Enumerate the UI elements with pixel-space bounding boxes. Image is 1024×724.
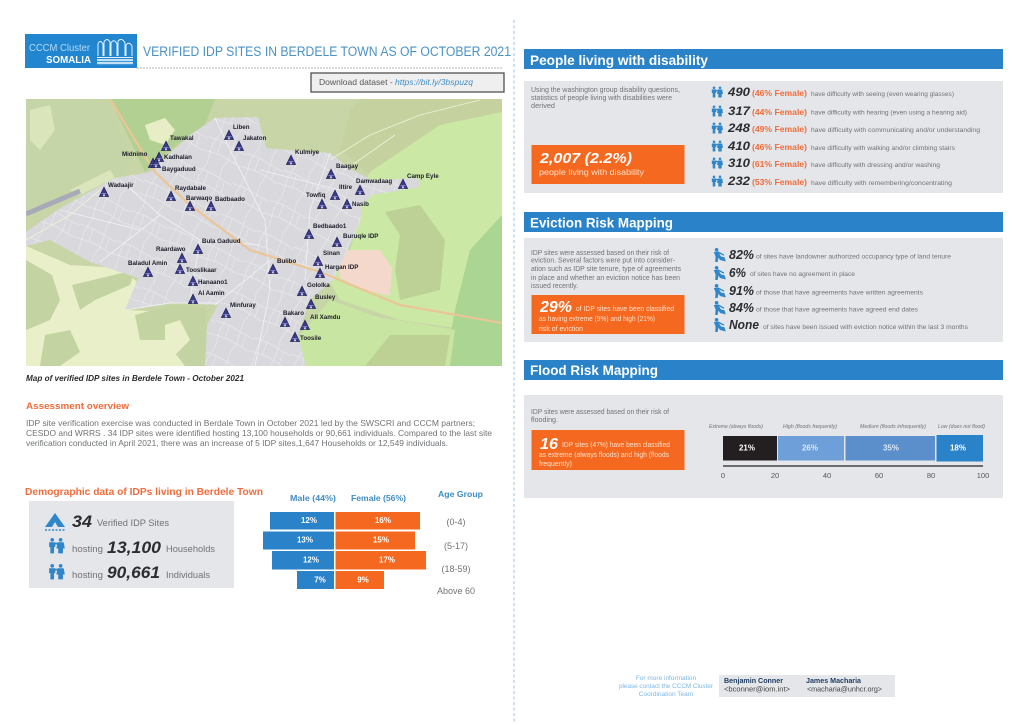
population pyramid: (5-17): [444, 541, 468, 551]
map site labels: Toosile: [300, 335, 322, 342]
eviction statistics list: of those that have agreements have written agreements: [756, 290, 924, 296]
map site labels: Baagay: [336, 163, 359, 170]
disability statistics list: 310: [728, 156, 750, 170]
stacked bar chart: flood risk: 21%: [739, 444, 755, 452]
disability intro text: derived: [531, 103, 555, 110]
callout: 16 sites: 16: [540, 436, 558, 453]
stacked bar chart: flood risk: Low (does not flood): [938, 424, 985, 430]
logo: CCCM Cluster Somalia: SOMALIA: [46, 55, 91, 66]
panel: key figures: 34: [72, 512, 93, 531]
map site labels: Bakaro: [283, 310, 304, 317]
disability statistics list: have difficulty with dressing and/or washing: [811, 162, 940, 169]
disability statistics list: have difficulty with walking and/or climbing stairs: [811, 145, 956, 152]
callout: 16 sites: [532, 430, 684, 470]
panel heading: eviction risk mapping: [524, 212, 1003, 232]
disability statistics list: (61% Female): [752, 159, 807, 169]
disability statistics list: 232: [727, 174, 750, 188]
callout: 16 sites: frequently): [539, 461, 572, 468]
eviction statistics list: 82%: [729, 247, 754, 262]
stacked bar chart: flood risk: 18%: [950, 444, 966, 452]
panel: people living with disability: [524, 81, 1003, 193]
footer: contact note: [619, 675, 714, 698]
download dataset box: Download dataset - https://bit.ly/3bspuzq: [319, 77, 473, 87]
map site labels: Bula Gaduud: [202, 238, 241, 245]
population pyramid: 13%: [297, 536, 313, 544]
footer: contacts: James Macharia: [806, 676, 862, 685]
population pyramid: (18-59): [441, 564, 471, 574]
icon: people: [49, 538, 65, 553]
map main road: [110, 99, 502, 323]
map site labels: Tawakal: [170, 135, 194, 142]
disability statistics list: 410: [727, 139, 750, 153]
logo: CCCM Cluster Somalia: CCCM Cluster: [29, 42, 90, 54]
map site labels: Midnimo: [122, 151, 148, 158]
callout: 29%: as having extreme (9%) and high (21%): [539, 316, 655, 323]
population pyramid: 16%: [375, 516, 391, 525]
footer: contacts: [719, 675, 895, 697]
disability statistics list: have difficulty with seeing (even wearing glasses): [811, 91, 954, 98]
flood intro text: IDP sites were assessed based on their risk of: [531, 409, 669, 416]
flood intro text: [531, 409, 669, 424]
eviction statistics list: 6%: [729, 265, 746, 280]
eviction intro text: [531, 250, 681, 290]
map site labels: Al Aamin: [198, 290, 225, 297]
footer: contacts: Benjamin Conner: [724, 676, 783, 685]
map site markers: [99, 130, 408, 342]
footer: contact note: please contact the CCCM Cluster: [619, 683, 714, 690]
map site labels: [108, 124, 439, 342]
map of verified IDP sites: [26, 99, 502, 366]
map site labels: Buruqle IDP: [343, 233, 378, 240]
panel: flood risk mapping: [524, 395, 1003, 498]
callout: 29%: [532, 295, 684, 334]
panel: key figures: hosting: [72, 570, 103, 580]
map site labels: Bulibo: [277, 258, 296, 265]
heading: demographic data: Demographic data of IDPs living in Berdele Town: [25, 486, 263, 498]
eviction statistics list: of sites have been issued with eviction notice within the last 3 months: [763, 324, 969, 331]
map site labels: Sinan: [323, 250, 340, 257]
map site labels: Damwadaag: [356, 178, 392, 185]
footer: contacts: <macharia@unhcr.org>: [807, 684, 883, 694]
map site labels: Minfuray: [230, 302, 256, 309]
eviction intro text: IDP sites were assessed based on their risk of: [531, 250, 669, 257]
heading: assessment overview: Assessment overview: [26, 401, 130, 412]
disability statistics list: (46% Female): [752, 142, 807, 152]
map site labels: Kadhalan: [164, 154, 192, 161]
panel: eviction risk mapping: [524, 238, 1003, 342]
map site labels: Busley: [315, 294, 336, 301]
eviction statistics list: 84%: [729, 300, 754, 315]
footer: contacts: <bconner@iom.int>: [724, 684, 791, 694]
stacked bar chart: flood risk: 80: [927, 471, 935, 480]
stacked bar chart: flood risk: Medium (floods infrequently): [860, 424, 926, 430]
map site labels: Camp Eyle: [407, 173, 439, 180]
disability statistics list: 490: [727, 85, 750, 99]
stacked bar chart: flood risk: Extreme (always floods): [709, 424, 763, 430]
map airstrip: [26, 191, 80, 214]
map site labels: All Xamdu: [310, 314, 340, 321]
map town built-up area: [26, 117, 420, 366]
disability statistics list: (44% Female): [752, 107, 807, 117]
map site labels: Hargan IDP: [325, 264, 358, 271]
panel: key figures: 90,661: [107, 563, 160, 582]
panel: key figures: Verified IDP Sites: [97, 518, 170, 528]
disability intro text: Using the washington group disability questions,: [531, 87, 680, 94]
assessment overview text: IDP site verification exercise was conducted in Berdale Town in October 2021 led by the SWSCRI and CCCM partners;: [26, 418, 475, 428]
population pyramid: [263, 489, 483, 596]
population pyramid: 7%: [314, 576, 326, 584]
map site labels: Raardawo: [156, 246, 186, 253]
title: VERIFIED IDP SITES IN BERDELE TOWN AS OF OCTOBER 2021: [143, 44, 511, 59]
callout: 2,007 people: people living with disability: [539, 167, 645, 177]
panel heading: flood risk mapping: [524, 360, 1003, 380]
panel heading: people living with disability: [524, 49, 1003, 69]
callout: 29%: 29%: [539, 299, 572, 316]
icon: people: [49, 564, 65, 579]
panel: key figures: Individuals: [166, 570, 211, 580]
disability statistics list: have difficulty with remembering/concentrating: [811, 180, 952, 187]
callout: 29%: of IDP sites have been classified: [576, 306, 674, 313]
eviction statistics list: of sites have landowner authorized occupancy type of land tenure: [756, 254, 951, 260]
map site labels: Tooslikaar: [186, 267, 217, 274]
assessment overview text: CESDO and WRRS . 34 IDP sites were identified hosting 13,100 households or 90,661 individuals. Compared to the last site: [26, 428, 492, 438]
panel heading: people living with disability: People living with disability: [530, 52, 708, 68]
population pyramid: 12%: [303, 556, 319, 564]
stacked bar chart: flood risk: 0: [721, 471, 725, 480]
disability statistics list: have difficulty with communicating and/or understanding: [811, 127, 980, 134]
population pyramid: (0-4): [446, 517, 466, 527]
map site labels: Hanaano1: [198, 279, 228, 286]
stacked bar chart: flood risk: 60: [875, 471, 883, 480]
stacked bar chart: flood risk: High (floods frequently): [783, 424, 837, 430]
download dataset box: [311, 73, 504, 92]
assessment overview text: verification conducted in April 2021, there was an increase of 5 IDP sites,1,647 Households or 12,549 individuals.: [26, 438, 448, 448]
map site labels: Wadaajir: [108, 182, 134, 189]
disability intro text: [531, 87, 680, 110]
population pyramid: Female (56%): [351, 493, 406, 503]
panel: key figures: [29, 501, 234, 588]
disability statistics list: (49% Female): [752, 124, 807, 134]
icon: IDP site tent: [45, 513, 65, 530]
stacked bar chart: flood risk: 100: [977, 471, 989, 480]
population pyramid: 9%: [357, 576, 369, 584]
population pyramid: 17%: [379, 556, 395, 564]
population pyramid: Male (44%): [290, 493, 336, 503]
callout: 2,007 people: [532, 145, 684, 184]
map site labels: Kulmiye: [295, 149, 320, 156]
stacked bar chart: flood risk: 20: [771, 471, 779, 480]
stacked bar chart: flood risk: 40: [823, 471, 831, 480]
callout: 29%: risk of eviction: [539, 326, 583, 333]
map caption: Map of verified IDP sites in Berdele Town - October 2021: [26, 373, 244, 383]
map site labels: Baladul Amin: [128, 260, 168, 267]
disability statistics list: 248: [727, 121, 750, 135]
population pyramid: 15%: [373, 536, 389, 544]
panel: key figures: 13,100: [107, 538, 162, 557]
population pyramid: Age Group: [438, 489, 483, 499]
map site labels: Baygaduud: [162, 166, 196, 173]
disability statistics list: (46% Female): [752, 88, 807, 98]
callout: 2,007 people: 2,007 (2.2%): [539, 150, 632, 167]
map site labels: Gololka: [307, 282, 330, 289]
map site labels: Nasib: [352, 201, 369, 208]
stacked bar chart: flood risk: 35%: [883, 444, 899, 452]
eviction statistics list: 91%: [729, 283, 754, 298]
map site labels: Liben: [233, 124, 250, 131]
eviction statistics list: of those that have agreements have agreed end dates: [756, 306, 919, 314]
stacked bar chart: flood risk: [709, 424, 989, 480]
map site labels: Iltire: [339, 184, 353, 191]
footer: contact note: For more information: [636, 675, 697, 682]
population pyramid: 12%: [301, 516, 317, 525]
map site labels: Towfiq: [306, 192, 326, 199]
eviction intro text: eviction. Several factors were put into consider-: [531, 258, 676, 264]
logo: CCCM Cluster Somalia: [25, 34, 137, 68]
assessment overview text: [26, 418, 492, 448]
disability statistics list: [712, 85, 980, 188]
map secondary roads: [26, 100, 480, 240]
map site labels: Badbaado: [215, 196, 245, 203]
map site labels: Bedbaado1: [313, 223, 347, 230]
disability statistics list: (53% Female): [752, 177, 807, 187]
callout: 16 sites: as extreme (always floods) and high (floods: [539, 452, 669, 459]
flood intro text: flooding.: [531, 417, 558, 424]
callout: 16 sites: IDP sites (47%) have been classified: [562, 442, 670, 449]
map land cover: [26, 99, 502, 366]
panel: key figures: Households: [166, 544, 216, 554]
map site labels: Jakaton: [243, 135, 267, 142]
panel: key figures: hosting: [72, 544, 103, 554]
eviction statistics list: None: [729, 317, 759, 332]
eviction statistics list: [714, 247, 969, 332]
population pyramid: Above 60: [437, 586, 475, 596]
eviction intro text: issued recently.: [531, 283, 578, 290]
eviction intro text: in place and whether an eviction notice has been: [531, 275, 680, 282]
stacked bar chart: flood risk: 26%: [802, 444, 818, 452]
disability statistics list: have difficulty with hearing (even using a hearing aid): [811, 110, 967, 116]
eviction statistics list: of sites have no agreement in place: [750, 271, 855, 278]
panel heading: flood risk mapping: Flood Risk Mapping: [530, 362, 658, 378]
vertical divider: [513, 20, 515, 724]
disability intro text: statistics of people living with disabilities were: [531, 95, 672, 102]
footer: contact note: Coordination Team: [639, 691, 693, 698]
disability statistics list: 317: [728, 104, 751, 118]
panel heading: eviction risk mapping: Eviction Risk Mapping: [530, 214, 673, 230]
eviction intro text: ation such as IDP site tenure, type of agreements: [531, 266, 681, 273]
map site labels: Raydabale: [175, 185, 207, 192]
map site labels: Barwaqo: [186, 195, 212, 202]
